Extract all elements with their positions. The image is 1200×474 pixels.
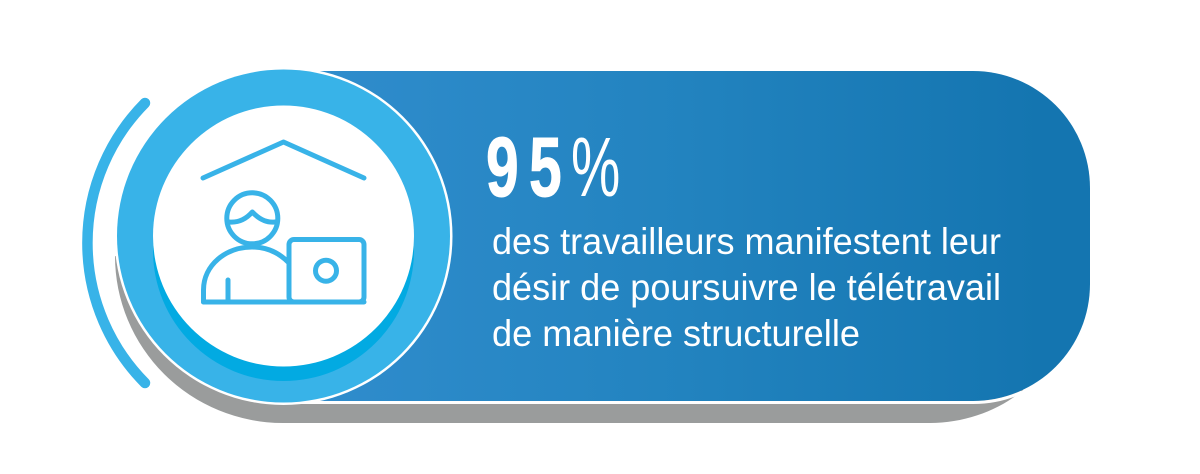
outer arc [87,103,145,383]
icon: person working at home [203,142,364,302]
description: de manière structurelle [492,313,860,354]
inner crescent [153,242,414,381]
grey drop shadow [115,256,1023,423]
infographic [82,70,1090,423]
laptop [289,240,364,302]
white disc [153,106,414,366]
headline 95%: % [571,122,620,215]
description [492,221,1001,354]
body [204,247,288,302]
roof [203,142,364,178]
description: des travailleurs manifestent leur [492,221,1001,262]
headline 95%: 5 [529,121,562,215]
description: désir de poursuivre le télétravail [492,267,1001,308]
icon badge [114,67,452,405]
headline 95% [486,121,620,215]
desk line [204,300,364,304]
hair [229,212,275,222]
blue banner [283,71,1090,401]
headline 95%: 9 [486,121,519,215]
laptop logo [316,260,336,281]
head [227,193,278,244]
banner bottom highlight [300,392,1022,403]
